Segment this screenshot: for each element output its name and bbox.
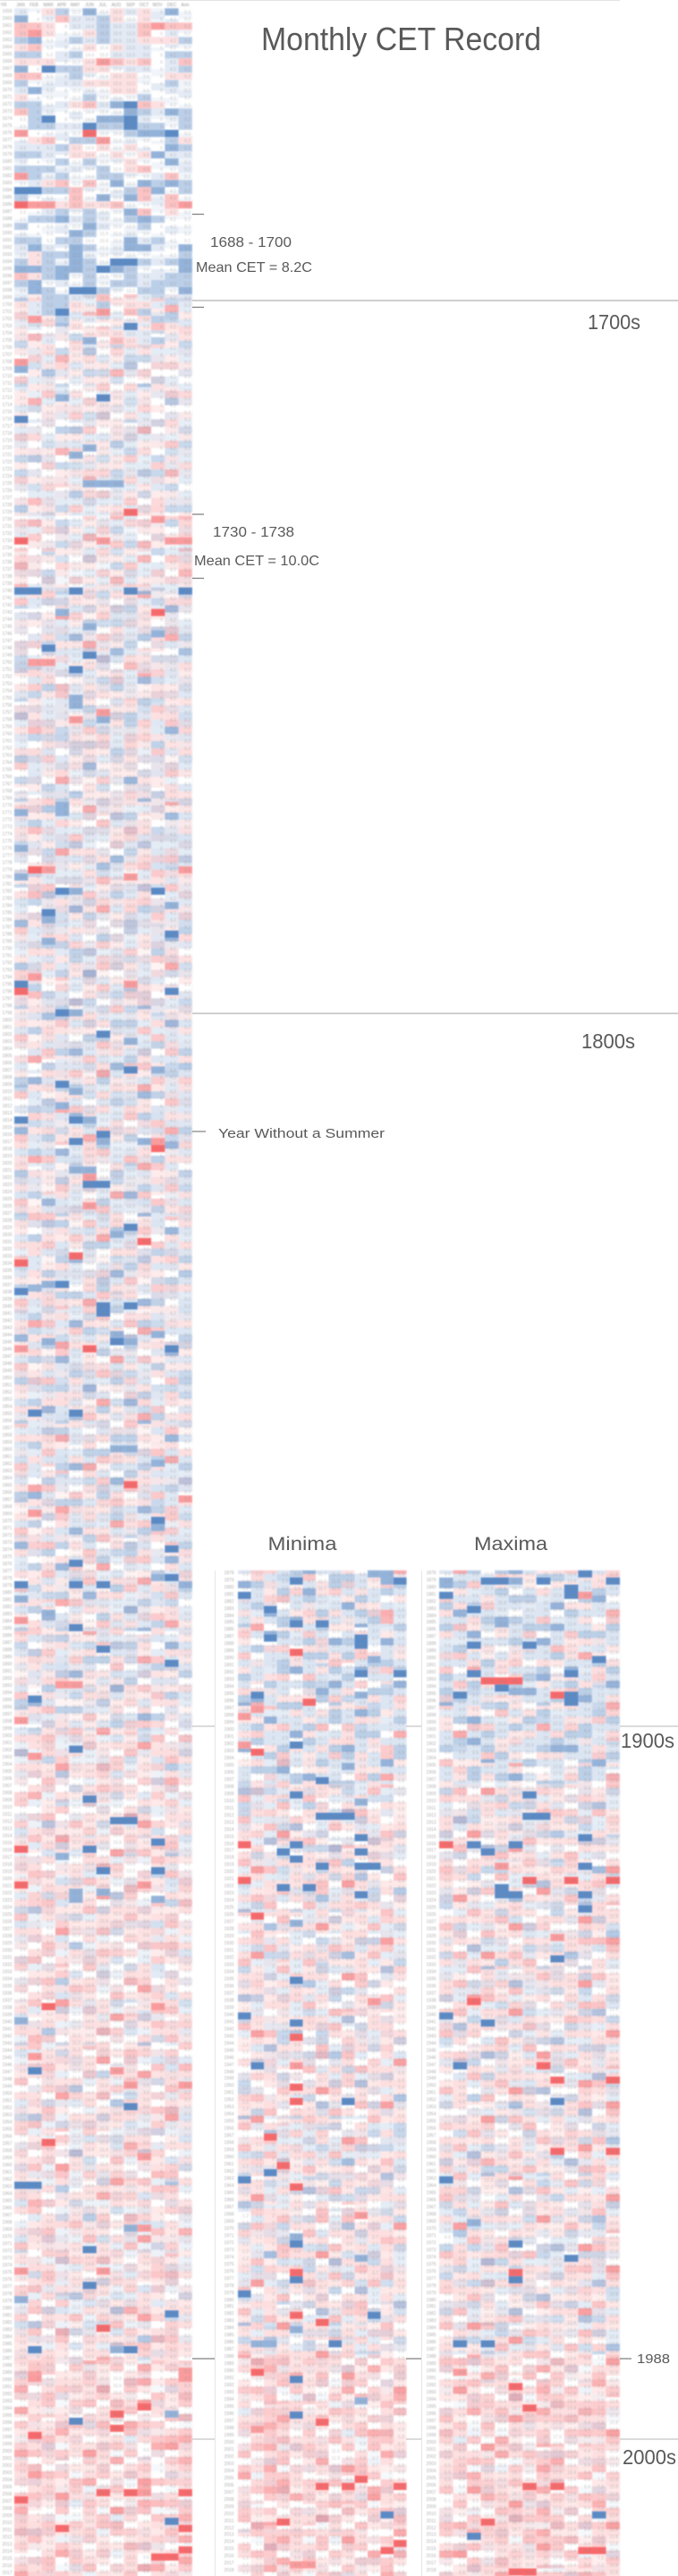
column headers: main [1, 3, 190, 8]
column headers: main: JUN [85, 3, 94, 8]
column headers: main: DEC [167, 3, 177, 8]
title: Monthly CET Record [261, 21, 541, 57]
annotation: 1688-1700 [192, 215, 312, 308]
column headers: main: SEP [126, 3, 136, 8]
label: 2000s: 2000s [623, 2445, 676, 2469]
panel: maxima heatmap 1878-2018 [439, 1571, 620, 2576]
column headers: main: FEB [30, 3, 39, 8]
top rule of the spreadsheet [0, 0, 620, 1]
annotation: 1730-1738: 1730 - 1738 [213, 525, 294, 540]
panel edge rules [215, 1571, 422, 2576]
cell values: minima [238, 1571, 406, 2576]
cell values: main [14, 8, 192, 2576]
year labels: maxima table: 1878 1879 1880 1881 1882 1883 1884 1885 1886 1887 1888 1889 1890 1891 1892 1893 1894 1895 1896 1897 1898 1899 1900 1901 1902 1903 1904 1905 1906 1907 1908 1909 1910 1911 1912 1913 1914 1915 1916 1917 1918 1919 1920 1921 1922 1923 1924 1925 1926 1927 1928 1929 1930 1931 1932 1933 1934 1935 1936 1937 1938 1939 1940 1941 1942 1943 1944 1945 1946 1947 1948 1949 1950 1951 1952 1953 1954 1955 1956 1957 1958 1959 1960 1961 1962 1963 1964 1965 1966 1967 1968 1969 1970 1971 1972 1973 1974 1975 1976 1977 1978 1979 1980 1981 1982 1983 1984 1985 1986 1987 1988 1989 1990 1991 1992 1993 1994 1995 1996 1997 1998 1999 2000 2001 2002 2003 2004 2005 2006 2007 2008 2009 2010 2011 2012 2013 2014 2015 2016 2017 2018 [426, 1571, 436, 2573]
decade rule: 1700s [192, 300, 678, 301]
year labels: minima table: 1878 1879 1880 1881 1882 1883 1884 1885 1886 1887 1888 1889 1890 1891 1892 1893 1894 1895 1896 1897 1898 1899 1900 1901 1902 1903 1904 1905 1906 1907 1908 1909 1910 1911 1912 1913 1914 1915 1916 1917 1918 1919 1920 1921 1922 1923 1924 1925 1926 1927 1928 1929 1930 1931 1932 1933 1934 1935 1936 1937 1938 1939 1940 1941 1942 1943 1944 1945 1946 1947 1948 1949 1950 1951 1952 1953 1954 1955 1956 1957 1958 1959 1960 1961 1962 1963 1964 1965 1966 1967 1968 1969 1970 1971 1972 1973 1974 1975 1976 1977 1978 1979 1980 1981 1982 1983 1984 1985 1986 1987 1988 1989 1990 1991 1992 1993 1994 1995 1996 1997 1998 1999 2000 2001 2002 2003 2004 2005 2006 2007 2008 2009 2010 2011 2012 2013 2014 2015 2016 2017 2018 [224, 1571, 234, 2573]
label: 1800s: 1800s [581, 1030, 635, 1053]
column headers: main: AUG [112, 3, 122, 8]
label: 1900s: 1900s [621, 1729, 674, 1752]
cell values: maxima [439, 1571, 620, 2576]
column headers: main: MAY [71, 3, 81, 8]
column headers: main: JUL [99, 3, 107, 8]
annotation: 1730-1738: Mean CET = 10.0C [194, 554, 319, 569]
column headers: main: OCT [140, 3, 148, 8]
column headers: main: JAN [16, 3, 25, 8]
heatmap cells: minima [238, 1571, 406, 2576]
heading: Maxima: Maxima [474, 1534, 547, 1555]
column headers: main: MAR [43, 3, 54, 8]
heading: Minima: Minima [268, 1534, 337, 1555]
decade rule: 1900s [192, 1725, 678, 1727]
column headers: main: Ann [182, 3, 190, 8]
annotation: 1988: 1988 [637, 2351, 670, 2367]
annotation: 1730-1738 [192, 514, 319, 578]
annotation: 1688-1700: 1688 - 1700 [210, 235, 292, 250]
panel: minima heatmap 1878-2018 [238, 1571, 406, 2576]
decade rule: 2000s [192, 2438, 678, 2440]
annotation: Year Without a Summer: Year Without a Summer [218, 1126, 385, 1141]
annotation: 1688-1700: Mean CET = 8.2C [196, 260, 312, 275]
heatmap cells: main [14, 8, 192, 2576]
column headers: main: YR [1, 3, 7, 8]
column headers: main: APR [57, 3, 67, 8]
label: 1700s: 1700s [588, 310, 640, 334]
heatmap: main monthly CET table 1659-2017 [1, 3, 192, 2576]
decade rule: 1800s [192, 1013, 678, 1014]
heatmap cells: maxima [439, 1571, 620, 2576]
column headers: main: NOV [153, 3, 163, 8]
year labels: main table: 1659 1660 1661 1662 1663 1664 1665 1666 1667 1668 1669 1670 1671 1672 1673 1674 1675 1676 1677 1678 1679 1680 1681 1682 1683 1684 1685 1686 1687 1688 1689 1690 1691 1692 1693 1694 1695 1696 1697 1698 1699 1700 1701 1702 1703 1704 1705 1706 1707 1708 1709 1710 1711 1712 1713 1714 1715 1716 1717 1718 1719 1720 1721 1722 1723 1724 1725 1726 1727 1728 1729 1730 1731 1732 1733 1734 1735 1736 1737 1738 1739 1740 1741 1742 1743 1744 1745 1746 1747 1748 1749 1750 1751 1752 1753 1754 1755 1756 1757 1758 1759 1760 1761 1762 1763 1764 1765 1766 1767 1768 1769 1770 1771 1772 1773 1774 1775 1776 1777 1778 1779 1780 1781 1782 1783 1784 1785 1786 1787 1788 1789 1790 1791 1792 1793 1794 1795 1796 1797 1798 1799 1800 1801 1802 1803 1804 1805 1806 1807 1808 1809 1810 1811 1812 1813 1814 1815 1816 1817 1818 1819 1820 1821 1822 1823 1824 1825 1826 1827 1828 1829 1830 1831 1832 1833 1834 1835 1836 1837 1838 1839 1840 1841 1842 1843 1844 1845 1846 1847 1848 1849 1850 1851 1852 1853 1854 1855 1856 1857 1858 1859 1860 1861 1862 1863 1864 1865 1866 1867 1868 1869 1870 1871 1872 1873 1874 1875 1876 1877 1878 1879 1880 1881 1882 1883 1884 1885 1886 1887 1888 1889 1890 1891 1892 1893 1894 1895 1896 1897 1898 1899 1900 1901 1902 1903 1904 1905 1906 1907 1908 1909 1910 1911 1912 1913 1914 1915 1916 1917 1918 1919 1920 1921 1922 1923 1924 1925 1926 1927 1928 1929 1930 1931 1932 1933 1934 1935 1936 1937 1938 1939 1940 1941 1942 1943 1944 1945 1946 1947 1948 1949 1950 1951 1952 1953 1954 1955 1956 1957 1958 1959 1960 1961 1962 1963 1964 1965 1966 1967 1968 1969 1970 1971 1972 1973 1974 1975 1976 1977 1978 1979 1980 1981 1982 1983 1984 1985 1986 1987 1988 1989 1990 1991 1992 1993 1994 1995 1996 1997 1998 1999 2000 2001 2002 2003 2004 2005 2006 2007 2008 2009 2010 2011 2012 2013 2014 2015 2016 2017 [2, 9, 13, 2576]
